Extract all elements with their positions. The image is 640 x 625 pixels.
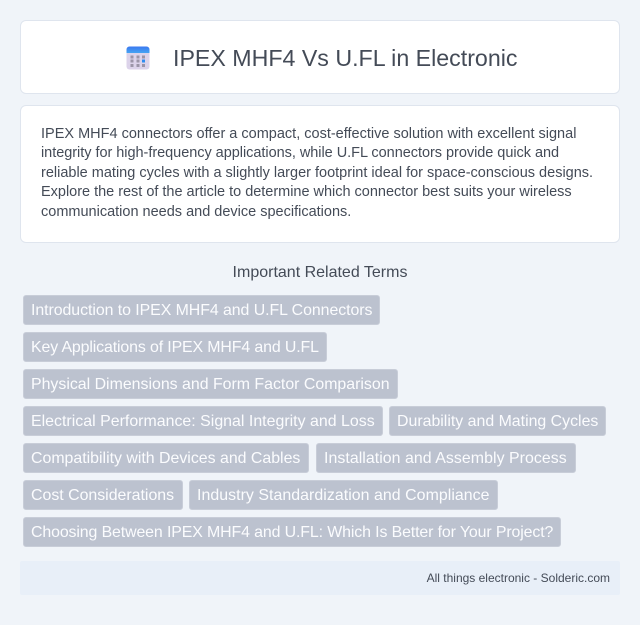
- related terms tags: Installation and Assembly Process: [324, 450, 567, 467]
- related terms tags: Cost Considerations: [31, 487, 174, 504]
- intro text: Explore the rest of the article to determine which connector best suits your wireless: [41, 184, 572, 200]
- related terms tags: Choosing Between IPEX MHF4 and U.FL: Which Is Better for Your Project?: [31, 524, 553, 541]
- intro text: communication needs and device specifications.: [41, 204, 351, 220]
- footer bar: [20, 561, 620, 595]
- intro text: IPEX MHF4 connectors offer a compact, cost-effective solution with excellent signal: [41, 126, 576, 142]
- related terms tags: [23, 295, 606, 547]
- related terms tags: Key Applications of IPEX MHF4 and U.FL: [31, 339, 319, 356]
- intro text panel: [20, 105, 620, 243]
- related terms tags: Compatibility with Devices and Cables: [31, 450, 300, 467]
- related terms tags: Industry Standardization and Compliance: [197, 487, 490, 504]
- intro text: [41, 126, 593, 220]
- related terms tags: Introduction to IPEX MHF4 and U.FL Connectors: [31, 302, 372, 319]
- icon: calendar: [126, 46, 150, 70]
- intro text: reliable mating cycles with a slightly larger footprint ideal for space-conscious designs.: [41, 165, 593, 181]
- heading: related terms: Important Related Terms: [233, 264, 407, 281]
- related terms tags: Physical Dimensions and Form Factor Comparison: [31, 376, 390, 393]
- intro text: integrity for high-frequency applications, while U.FL connectors provide quick and: [41, 145, 559, 161]
- related terms tags: Electrical Performance: Signal Integrity and Loss: [31, 413, 375, 430]
- title: IPEX MHF4 Vs U.FL in Electronic: [173, 45, 517, 71]
- related terms tags: Durability and Mating Cycles: [397, 413, 598, 430]
- header panel: [20, 20, 620, 94]
- footer credit: All things electronic - Solderic.com: [427, 571, 610, 585]
